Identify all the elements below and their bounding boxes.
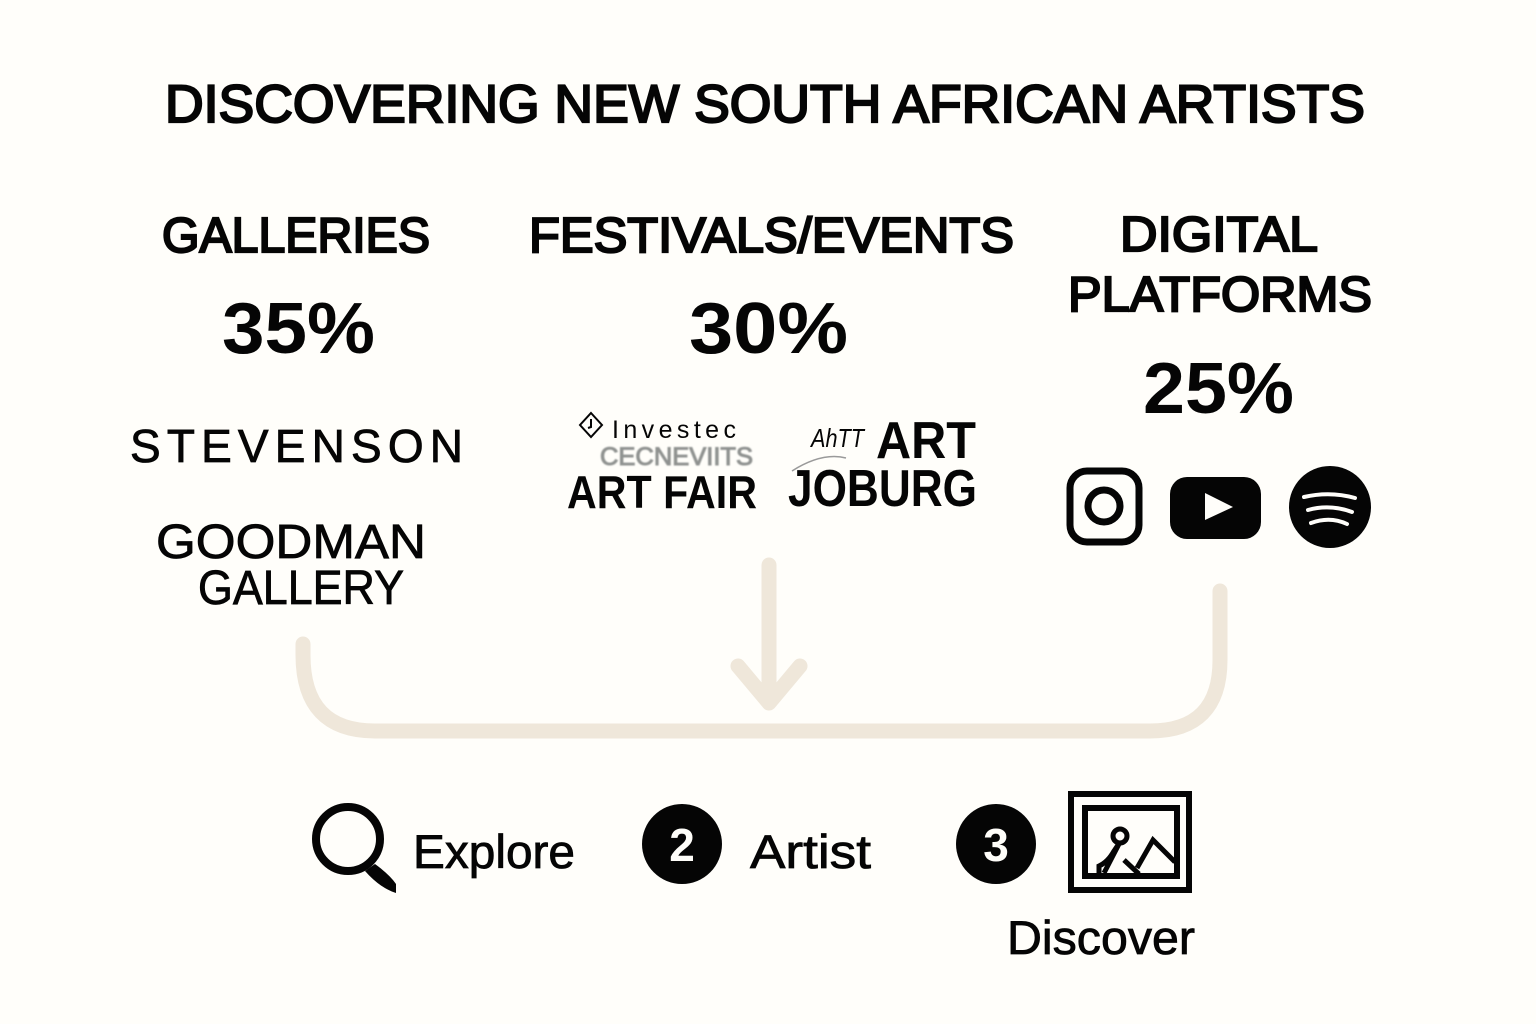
logo: Investec Art Fair — [567, 413, 757, 518]
icon: youtube — [1170, 477, 1261, 539]
logo: Investec Art Fair: Investec — [612, 416, 736, 444]
heading: digital platforms: PLATFORMS — [1068, 268, 1372, 322]
connector: merging arrows — [303, 565, 1220, 731]
logo: Goodman Gallery: GALLERY — [198, 562, 404, 615]
stat: 30%: 30% — [689, 289, 848, 369]
icon: framed picture — [1071, 794, 1189, 890]
step 1: explore — [316, 807, 575, 893]
logo: Art Joburg: AhTT — [809, 423, 866, 453]
logo: Art Joburg: ART — [876, 412, 976, 470]
heading: digital platforms — [1068, 208, 1372, 322]
heading: digital platforms: DIGITAL — [1120, 208, 1318, 262]
logo: Investec Art Fair: ART FAIR — [567, 466, 757, 518]
step 2: artist — [642, 804, 871, 884]
panel: galleries — [130, 209, 463, 615]
panel: festivals and events — [529, 209, 1014, 518]
title: DISCOVERING NEW SOUTH AFRICAN ARTISTS — [165, 75, 1365, 134]
stat: 35%: 35% — [222, 289, 375, 369]
logo: Stevenson: STEVENSON — [130, 420, 463, 472]
stat: 25%: 25% — [1143, 349, 1294, 429]
badge: 3: 3 — [983, 819, 1009, 871]
icon: investec diamond — [580, 413, 602, 437]
label: explore: Explore — [413, 825, 575, 878]
logo: Art Joburg — [788, 412, 977, 518]
logo: Art Joburg: JOBURG — [788, 460, 977, 518]
logo: Goodman Gallery — [156, 516, 426, 615]
badge: 2: 2 — [669, 819, 695, 871]
label: artist: Artist — [750, 825, 871, 878]
badge: 3 — [956, 804, 1036, 884]
badge: 2 — [642, 804, 722, 884]
logo: Goodman Gallery: GOODMAN — [156, 516, 426, 569]
icon: magnifying glass — [316, 807, 396, 893]
panel: digital platforms — [1068, 208, 1372, 548]
step 3: discover — [956, 794, 1195, 964]
icon: spotify — [1289, 466, 1371, 548]
heading: festivals/events: FESTIVALS/EVENTS — [529, 209, 1014, 263]
logo: Investec Art Fair: CECNEVIITS — [600, 443, 753, 471]
heading: galleries: GALLERIES — [162, 209, 430, 263]
icon: instagram — [1070, 471, 1139, 542]
label: discover: Discover — [1007, 911, 1195, 964]
